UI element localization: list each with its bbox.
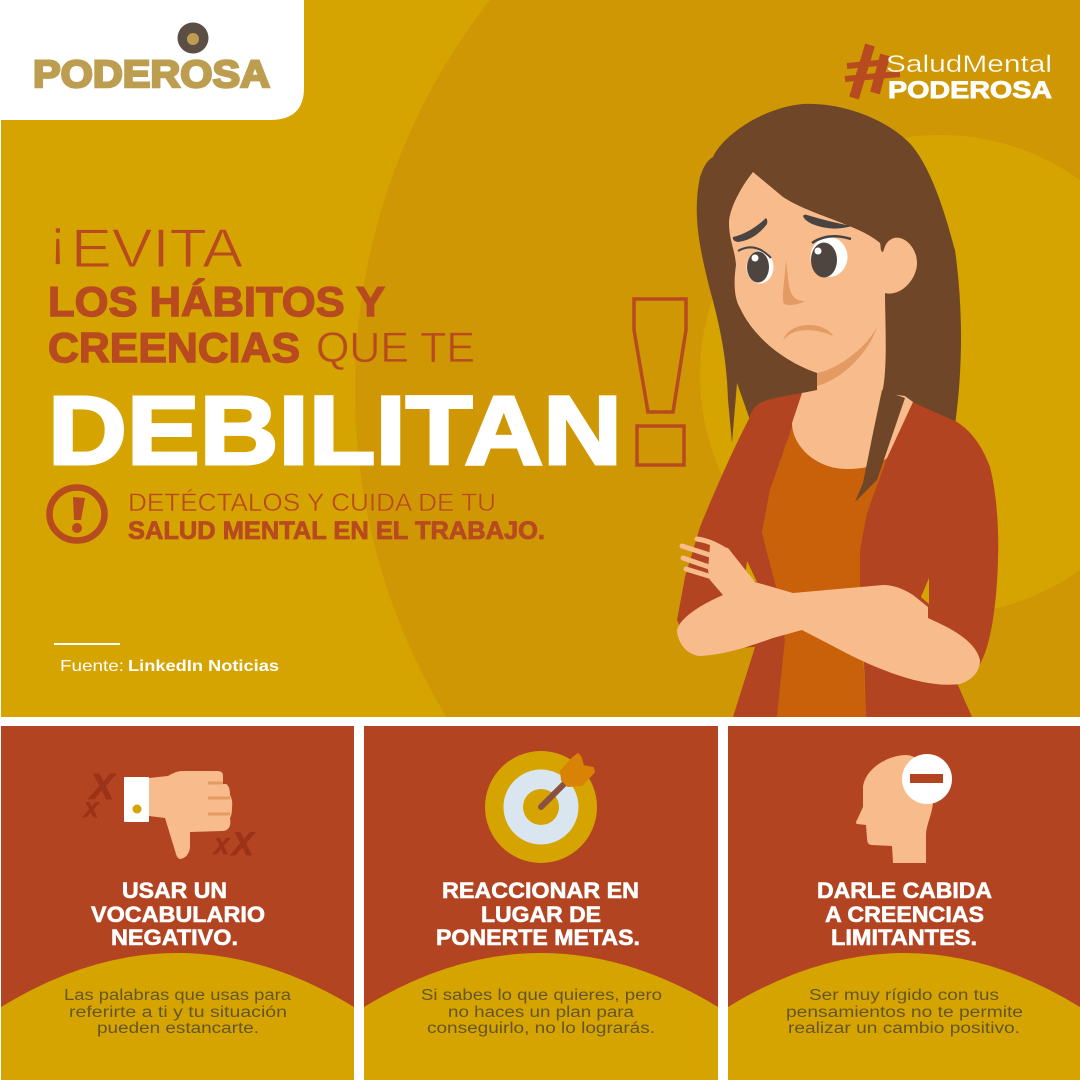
icon: target with dart xyxy=(485,751,597,863)
title: CREENCIAS xyxy=(48,324,300,371)
icon: outlined exclamation mark xyxy=(634,299,686,465)
heading: DARLE CABIDA xyxy=(817,878,992,903)
eyebrows xyxy=(733,215,852,242)
description: Ser muy rígido con tus xyxy=(809,987,999,1004)
description: Las palabras que usas para xyxy=(64,987,291,1004)
panel: hero xyxy=(1,0,1080,717)
heading: REACCIONAR EN xyxy=(442,878,639,903)
source line: Fuente: xyxy=(60,658,124,675)
title: LOS HÁBITOS Y xyxy=(48,278,385,325)
heading: PONERTE METAS. xyxy=(436,925,640,950)
subtitle: SALUD MENTAL EN EL TRABAJO. xyxy=(128,517,545,545)
icon: circled exclamation xyxy=(50,488,104,540)
heading: USAR UN xyxy=(122,878,227,903)
description: pueden estancarte. xyxy=(97,1020,259,1037)
arms xyxy=(677,545,980,685)
heading xyxy=(91,878,265,950)
description: realizar un cambio positivo. xyxy=(788,1020,1020,1037)
icon: head with minus sign xyxy=(856,754,952,863)
heading: NEGATIVO. xyxy=(111,925,238,950)
hair back xyxy=(697,104,961,443)
hashtag logo: PODEROSA xyxy=(888,77,1052,104)
description: Si sabes lo que quieres, pero xyxy=(421,987,662,1004)
heading: LUGAR DE xyxy=(481,902,601,927)
title: DEBILITAN xyxy=(48,376,622,485)
icon: thumbs down: X xyxy=(212,834,230,859)
illustration: worried woman xyxy=(677,104,998,717)
jacket left xyxy=(677,393,802,717)
neck and face xyxy=(729,172,917,469)
fingers xyxy=(682,539,728,577)
heading: VOCABULARIO xyxy=(91,902,265,927)
heading: LIMITANTES. xyxy=(831,925,977,950)
logo box xyxy=(0,0,304,120)
jacket right xyxy=(860,402,998,717)
description xyxy=(786,987,1023,1037)
icon: thumbs down xyxy=(83,766,255,862)
heading xyxy=(436,878,640,950)
description: referirte a ti y tu situación xyxy=(69,1004,287,1021)
title: ¡ xyxy=(49,209,67,268)
eyes xyxy=(738,236,851,284)
mouth xyxy=(783,325,833,340)
description: conseguirlo, no lo lograrás. xyxy=(427,1020,655,1037)
icon: thumbs down: X xyxy=(230,826,255,862)
icon: thumbs down: X xyxy=(83,799,100,822)
subtitle: DETÉCTALOS Y CUIDA DE TU xyxy=(128,488,496,517)
title: EVITA xyxy=(71,217,243,279)
source line: LinkedIn Noticias xyxy=(128,658,279,675)
icon: thumbs down: X xyxy=(88,766,116,807)
panel: usar un vocabulario negativo xyxy=(1,726,354,1080)
source line xyxy=(54,643,279,675)
shirt xyxy=(762,420,890,717)
hair strand xyxy=(855,390,905,502)
subtitle xyxy=(128,488,545,545)
panel: darle cabida a creencias limitantes xyxy=(728,726,1080,1080)
heading: A CREENCIAS xyxy=(825,902,984,927)
panel: reaccionar en lugar de ponerte metas xyxy=(364,726,718,1080)
nose xyxy=(783,260,805,305)
description xyxy=(64,987,291,1037)
description xyxy=(421,987,662,1037)
hashtag logo xyxy=(845,45,1052,104)
description: pensamientos no te permite xyxy=(786,1004,1023,1021)
neck shadow xyxy=(817,327,877,386)
title: QUE TE xyxy=(316,324,475,372)
hashtag logo: SaludMental xyxy=(886,51,1052,78)
heading xyxy=(817,878,992,950)
description: no haces un plan para xyxy=(448,1004,634,1021)
title xyxy=(48,209,622,485)
logo box: PODEROSA xyxy=(33,54,270,96)
waist gaps xyxy=(745,561,929,604)
